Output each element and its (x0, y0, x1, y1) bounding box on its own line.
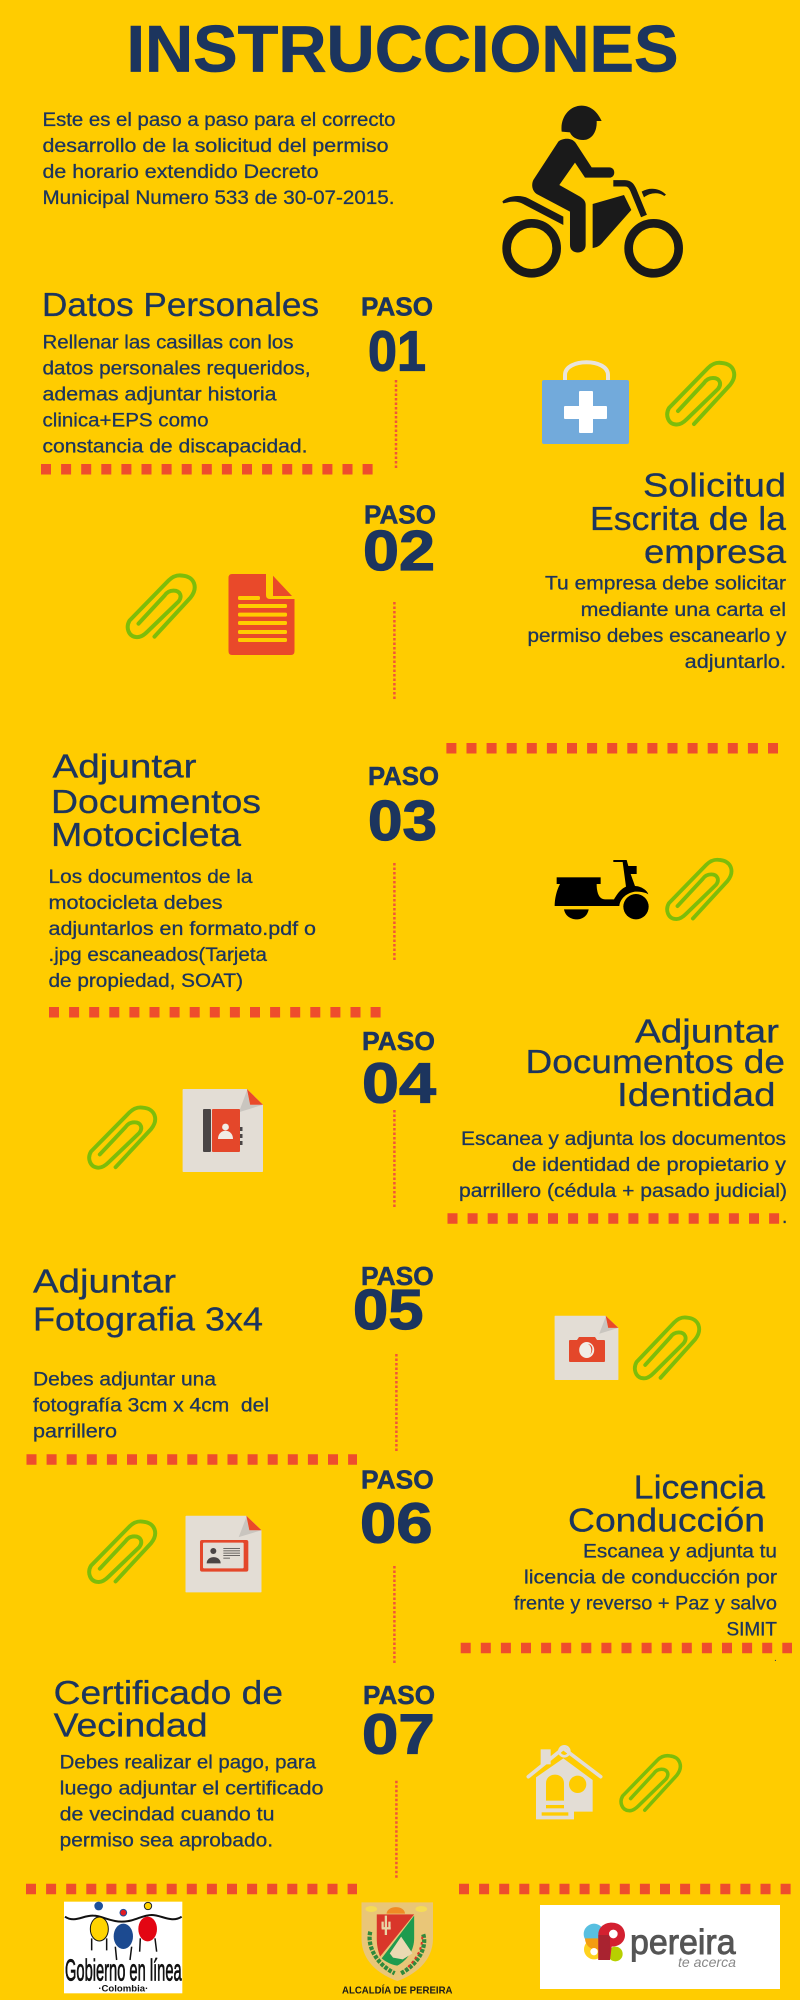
panel: paso 01 (41, 286, 734, 469)
body text: paso 03: motocicleta debes (48, 893, 222, 914)
body text: paso 03 (48, 867, 316, 992)
body text: paso 03: .jpg escaneados(Tarjeta (48, 945, 267, 966)
body text: paso 06: . (774, 1653, 777, 1664)
body text: paso 07: Debes realizar el pago, para (60, 1753, 316, 1774)
body text: paso 06: Escanea y adjunta tu (583, 1541, 777, 1562)
logo: pereira te acerca (540, 1905, 780, 1989)
step label: paso 03: 03 (368, 789, 437, 853)
logo: gobierno en linea: ·Colombia· (98, 1984, 148, 1994)
heading: solicitud escrita: Escrita de la (590, 500, 787, 537)
body text: paso 02: adjuntarlo. (685, 652, 786, 673)
heading: licencia conduccion (568, 1468, 766, 1539)
step label: paso 02 (363, 500, 436, 583)
body text: paso 01: datos personales requeridos, (42, 358, 310, 380)
intro text (42, 110, 396, 209)
body text: paso 04: . (782, 1207, 787, 1228)
body text: paso 02: mediante una carta el (581, 600, 786, 621)
body text: paso 04: parrillero (cédula + pasado judicial) (459, 1181, 787, 1202)
step label: paso 01 (361, 292, 433, 384)
step label: paso 03 (368, 761, 439, 853)
heading: documentos de identidad: Documentos de (526, 1043, 785, 1080)
step label: paso 06: 06 (360, 1492, 433, 1556)
heading: documentos motocicleta: Adjuntar (52, 748, 197, 784)
icon: orange document (228, 574, 294, 655)
step label: paso 07: 07 (362, 1702, 435, 1766)
step label: paso 02: 02 (363, 519, 435, 583)
step label: paso 06 (360, 1464, 434, 1556)
logo: pereira te acerca: pereira (630, 1923, 736, 1962)
body text: paso 06: SIMIT (726, 1619, 777, 1640)
body text: paso 06: licencia de conducción por (524, 1567, 778, 1588)
heading: datos personales: Datos Personales (42, 286, 319, 323)
step label: paso 07: PASO (363, 1680, 435, 1710)
icon: paperclip 5 (635, 1317, 699, 1378)
heading: documentos motocicleta: Documentos (51, 783, 261, 820)
heading: fotografia: Fotografia 3x4 (33, 1301, 263, 1338)
body text: paso 07: de vecindad cuando tu (60, 1805, 275, 1826)
body text: paso 03: de propiedad, SOAT) (48, 971, 243, 992)
intro text: desarrollo de la solicitud del permiso (42, 136, 388, 157)
icon: paperclip 2 (128, 575, 195, 637)
panel: paso 03 (48, 748, 731, 1012)
heading: certificado de vecindad: Certificado de (54, 1674, 283, 1711)
step label: paso 04: PASO (362, 1026, 435, 1056)
heading: licencia conduccion: Licencia (634, 1468, 766, 1505)
step label: paso 01: 01 (368, 320, 426, 384)
intro text: Este es el paso a paso para el correcto (42, 110, 396, 131)
heading: certificado de vecindad (54, 1674, 283, 1744)
panel: paso 07 (54, 1674, 680, 1879)
heading: fotografia: Adjuntar (33, 1263, 176, 1300)
heading: documentos de identidad: Identidad (617, 1076, 776, 1113)
body text: paso 02 (528, 574, 787, 673)
heading: solicitud escrita (590, 466, 787, 570)
icon: address book document (183, 1089, 263, 1172)
heading: solicitud escrita: Solicitud (643, 466, 786, 504)
step label: paso 05 (353, 1261, 434, 1342)
step label: paso 01: PASO (361, 292, 433, 322)
icon: paperclip 1 (667, 363, 734, 425)
step label: paso 04 (362, 1026, 436, 1116)
icon: scooter (555, 860, 649, 919)
logo: pereira te acerca: te acerca (678, 1954, 736, 1970)
body text: paso 04: de identidad de propietario y (512, 1155, 787, 1176)
icon: paperclip 3 (667, 860, 731, 919)
body text: paso 03: adjuntarlos en formato.pdf o (48, 919, 316, 940)
title: INSTRUCCIONES (126, 12, 678, 86)
heading: documentos motocicleta: Motocicleta (51, 816, 242, 853)
body text: paso 04 (459, 1129, 787, 1228)
heading: fotografia (33, 1263, 263, 1338)
body text: paso 01: clinica+EPS como (42, 410, 209, 432)
intro text: Municipal Numero 533 de 30-07-2015. (42, 188, 394, 209)
panel: paso 02 (128, 466, 787, 748)
body text: paso 01: ademas adjuntar historia (42, 384, 277, 406)
icon: camera document (555, 1316, 618, 1380)
heading: licencia conduccion: Conducción (568, 1502, 765, 1539)
step label: paso 07 (362, 1680, 435, 1766)
intro text: de horario extendido Decreto (42, 162, 318, 183)
step label: paso 03: PASO (368, 761, 439, 791)
step label: paso 02: PASO (364, 500, 436, 530)
body text: paso 03: Los documentos de la (48, 867, 253, 888)
panel: paso 04 (89, 1013, 787, 1228)
panel: paso 06 (89, 1464, 792, 1665)
heading: documentos de identidad: Adjuntar (635, 1013, 779, 1050)
heading: certificado de vecindad: Vecindad (54, 1707, 208, 1744)
heading: documentos de identidad (526, 1013, 785, 1113)
body text: paso 01: constancia de discapacidad. (42, 436, 308, 458)
icon: id card document (186, 1516, 262, 1592)
icon: house (528, 1746, 601, 1819)
step label: paso 06: PASO (361, 1464, 434, 1494)
panel: paso 05 (26, 1261, 699, 1460)
body text: paso 06: frente y reverso + Paz y salvo (514, 1593, 777, 1614)
logo: escudo alcaldia de pereira: ALCALDÍA DE PEREIRA (342, 1983, 453, 1996)
heading: solicitud escrita: empresa (644, 533, 787, 570)
icon: paperclip 4 (89, 1107, 155, 1168)
icon: paperclip 6 (89, 1521, 155, 1582)
body text: paso 07: permiso sea aprobado. (60, 1831, 273, 1852)
body text: paso 05: fotografía 3cm x 4cm del (33, 1396, 269, 1417)
body text: paso 01: Rellenar las casillas con los (42, 332, 294, 354)
body text: paso 05 (33, 1370, 269, 1443)
body text: paso 07 (60, 1753, 323, 1852)
step label: paso 05: 05 (353, 1278, 424, 1342)
step label: paso 05: PASO (361, 1261, 434, 1291)
body text: paso 02: permiso debes escanearlo y (528, 626, 787, 647)
icon: medical kit (542, 362, 629, 444)
body text: paso 04: Escanea y adjunta los documentos (461, 1129, 786, 1150)
icon: paperclip 7 (621, 1756, 680, 1811)
icon: motorcycle rider (502, 106, 679, 273)
body text: paso 06 (514, 1541, 778, 1664)
heading: documentos motocicleta (51, 748, 261, 853)
logo: gobierno en linea (64, 1902, 182, 1994)
body text: paso 07: luego adjuntar el certificado (60, 1779, 323, 1800)
step label: paso 04: 04 (362, 1052, 436, 1116)
text: Gobierno en línea (65, 1954, 182, 1988)
body text: paso 05: parrillero (33, 1422, 117, 1443)
logo: escudo alcaldia de pereira (342, 1902, 453, 1996)
body text: paso 05: Debes adjuntar una (33, 1370, 216, 1391)
body text: paso 02: Tu empresa debe solicitar (545, 574, 787, 594)
body text: paso 01 (42, 332, 310, 458)
